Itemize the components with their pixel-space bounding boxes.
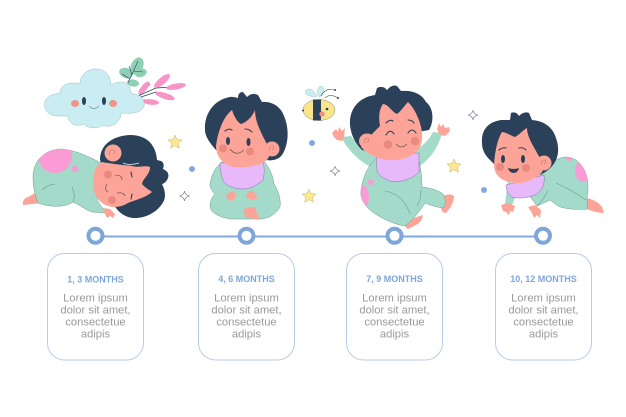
icon: bee [302,86,339,120]
icon: smiling cloud [45,69,144,128]
sparkle 1 [180,191,190,201]
hair [205,92,288,160]
card heading: 10, 12 MONTHS [510,274,577,284]
facial features [384,140,392,149]
card: 7, 9 months [346,254,442,360]
facial features [496,163,504,171]
icon: green leaf sprig [118,55,148,87]
star yellow 2 [302,189,316,202]
ear [104,144,122,162]
card text: Lorem ipsum [511,292,576,304]
card: 10, 12 months [496,254,592,360]
baby 4: crawling [482,112,604,218]
bib [220,160,264,189]
timeline node 1 [88,229,102,243]
dot 2 [309,140,315,146]
face [361,102,422,160]
arms [341,132,442,169]
pajama patches [360,185,369,206]
card text: Lorem ipsum [362,292,427,304]
hands and foot [226,191,260,220]
card text: consectetue [513,316,574,328]
baby 1: sleeping [23,135,168,218]
hand [103,208,115,218]
timeline node 2 [240,229,254,243]
hands [332,123,450,141]
card: 1, 3 months [48,254,144,360]
hair [350,86,432,152]
sparkle 3 [468,110,478,120]
facial features [104,170,112,178]
body [525,157,588,209]
card heading: 7, 9 MONTHS [366,274,423,284]
foot [23,191,42,205]
facial features [219,144,227,152]
face [93,162,152,207]
dot 3 [481,187,487,193]
card text: consectetue [216,316,277,328]
dot 1 [189,166,195,172]
body [33,149,106,213]
body [210,160,280,219]
hair [482,112,558,175]
hands [501,203,541,218]
baby 3: arms raised [332,86,454,229]
hair [100,135,168,218]
ear [264,142,280,156]
timeline [88,229,550,243]
foot [587,198,604,213]
card text: Lorem ipsum [214,292,279,304]
face [216,110,270,167]
card heading: 1, 3 MONTHS [67,274,124,284]
star yellow 1 [168,135,182,148]
pajama patch [566,157,588,182]
pajama patches [38,149,78,173]
card text: dolor sit amet, [211,304,282,316]
card text: adipis [380,328,410,340]
ear [359,134,375,148]
card text: dolor sit amet, [508,304,579,316]
face [494,128,543,183]
baby 2: sitting [205,92,288,220]
card text: consectetue [65,316,126,328]
arm [505,180,518,205]
card text: adipis [529,328,559,340]
card text: Lorem ipsum [63,292,128,304]
bib [506,175,544,198]
card text: adipis [81,328,111,340]
ear [536,156,552,170]
icon: pink flower branch [137,72,186,106]
timeline node 3 [388,229,402,243]
sparkle 2 [330,166,340,176]
body [361,158,445,226]
star yellow 3 [447,159,461,172]
feet [404,194,454,229]
timeline node 4 [536,229,550,243]
bib [376,153,419,182]
card heading: 4, 6 MONTHS [218,274,275,284]
card text: dolor sit amet, [60,304,131,316]
card text: adipis [232,328,262,340]
card text: dolor sit amet, [359,304,430,316]
card text: consectetue [364,316,425,328]
card: 4, 6 months [198,254,294,360]
